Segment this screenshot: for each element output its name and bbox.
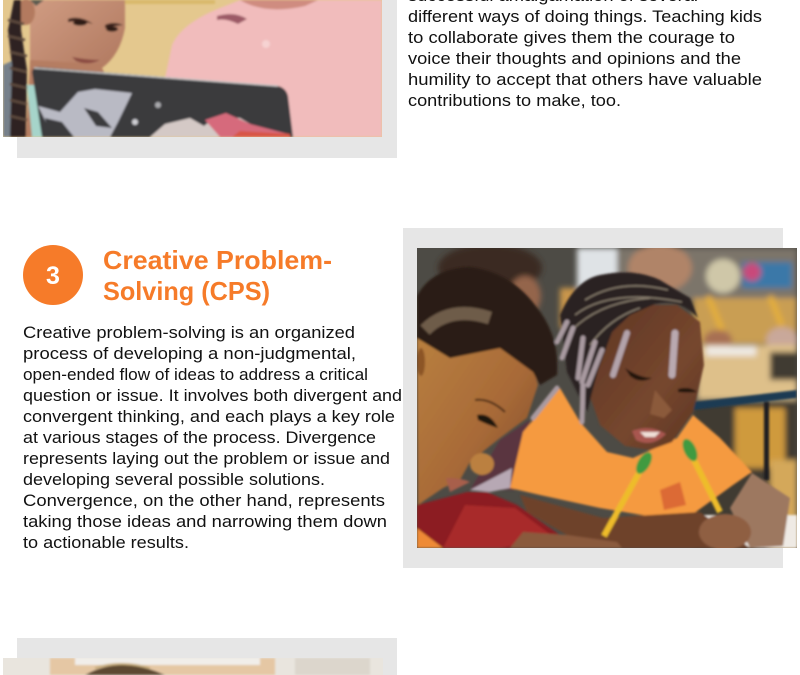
text block: CPS paragraph: at various stages of the process. Divergence xyxy=(23,429,376,447)
text block: CPS paragraph: taking those ideas and narrowing them down xyxy=(23,513,387,531)
panel: collaboration photo frame xyxy=(3,0,397,158)
text block: CPS paragraph: Convergence, on the other hand, represents xyxy=(23,492,385,510)
boy head xyxy=(417,330,538,505)
girl features xyxy=(625,368,697,392)
heading: Creative Problem-Solving (CPS): Creative Problem- xyxy=(103,245,332,275)
photo: two children writing in classroom xyxy=(417,244,798,550)
boy clothing xyxy=(417,492,565,548)
text block: CPS paragraph: question or issue. It involves both divergent and xyxy=(23,387,402,405)
laptop xyxy=(32,67,293,137)
text block: CPS paragraph: developing several possible solutions. xyxy=(23,471,325,489)
text block: collaboration paragraph: different ways of doing things. Teaching kids xyxy=(408,8,762,26)
panel: CPS photo frame xyxy=(403,228,798,568)
number badge: 3: 3 xyxy=(46,262,60,290)
photo: cropped next section image xyxy=(3,658,383,675)
girl shirt xyxy=(510,388,752,518)
panel: next section photo frame xyxy=(3,638,397,675)
text block: collaboration paragraph: humility to accept that others have valuable xyxy=(408,71,762,89)
text block: CPS paragraph xyxy=(23,324,402,552)
text block: CPS paragraph: Creative problem-solving is an organized xyxy=(23,324,355,342)
heading: Creative Problem-Solving (CPS) xyxy=(103,245,332,306)
text block: CPS paragraph: convergent thinking, and each plays a key role xyxy=(23,408,395,426)
heading: Creative Problem-Solving (CPS): Solving (CPS) xyxy=(103,276,270,306)
girl head xyxy=(587,305,704,450)
text block: collaboration paragraph xyxy=(408,0,762,110)
girl xyxy=(3,60,14,137)
text block: collaboration paragraph: to collaborate gives them the courage to xyxy=(408,29,735,47)
number badge: 3 xyxy=(23,245,83,305)
pencils xyxy=(604,462,645,536)
beads xyxy=(613,333,627,375)
boy hair xyxy=(417,267,557,385)
braid xyxy=(8,0,27,137)
text block: CPS paragraph: represents laying out the problem or issue and xyxy=(23,450,390,468)
pink shirt xyxy=(165,0,382,137)
girl arm xyxy=(520,495,750,548)
text block: collaboration paragraph: voice their thoughts and opinions and the xyxy=(408,50,741,68)
text block: collaboration paragraph: contributions to make, too. xyxy=(408,92,621,110)
text block: CPS paragraph: open-ended flow of ideas to address a critical xyxy=(23,366,368,384)
photo: girl and man with laptop xyxy=(3,0,382,137)
chair behind xyxy=(470,420,530,490)
right arm and paper xyxy=(703,513,797,548)
text block: CPS paragraph: process of developing a non-judgmental, xyxy=(23,345,356,363)
text block: CPS paragraph: to actionable results. xyxy=(23,534,189,552)
girl hair xyxy=(560,272,698,412)
